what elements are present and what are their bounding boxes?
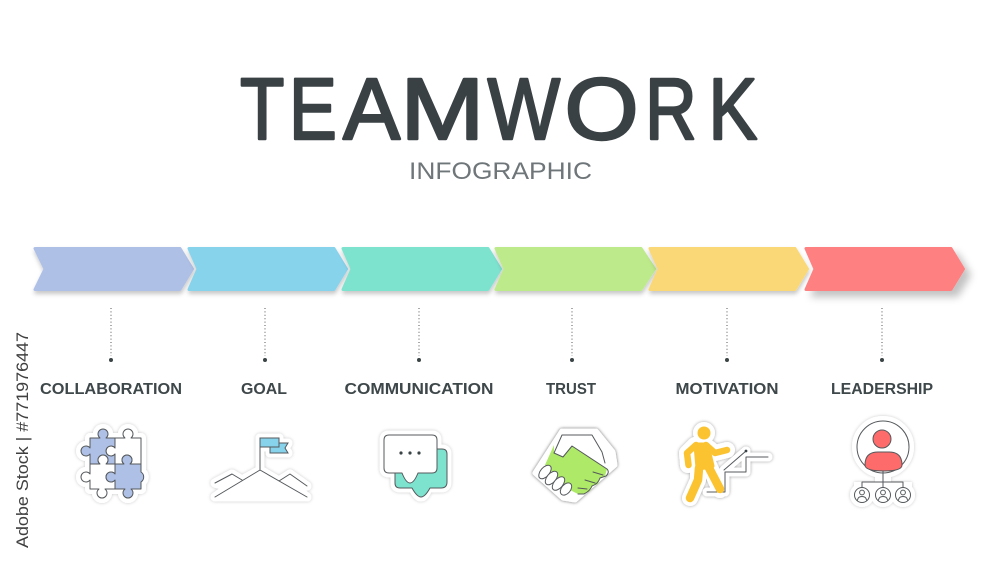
label: communication: COMMUNICATION (344, 381, 494, 398)
subtitle: INFOGRAPHIC (409, 158, 592, 185)
connector dots (109, 308, 884, 362)
arrow: leadership (806, 248, 964, 290)
label: collaboration: COLLABORATION (40, 381, 182, 398)
title: R (645, 60, 697, 158)
title: M (400, 60, 484, 158)
title: T (240, 61, 284, 159)
title: O (564, 61, 639, 158)
icon: handshake (535, 431, 615, 500)
title: A (343, 61, 400, 158)
icon: puzzle (81, 429, 144, 498)
label: trust: TRUST (546, 381, 596, 398)
text: Adobe Stock (833, 72, 995, 215)
text: Adobe Stock (423, 52, 585, 195)
arrow: collaboration (35, 248, 192, 290)
arrow: goal (189, 248, 346, 290)
title: E (289, 60, 337, 158)
icon: speech bubbles (384, 435, 447, 497)
text: Adobe Stock (833, 232, 995, 375)
title: K (708, 61, 757, 158)
text: Adobe Stock (43, 52, 205, 195)
label: goal: GOAL (241, 381, 287, 398)
title (240, 60, 757, 159)
text: Adobe Stock (713, 392, 875, 535)
text: Adobe Stock (383, 392, 545, 535)
icon: mountain flag (215, 438, 307, 497)
label: motivation: MOTIVATION (676, 381, 778, 398)
title: W (488, 60, 560, 158)
text: Adobe Stock (503, 192, 665, 335)
arrow: motivation (650, 248, 808, 290)
text: Adobe Stock (53, 402, 215, 545)
arrow: communication (343, 248, 500, 290)
side credit: Adobe Stock | #771976447 (13, 332, 32, 548)
arrow timeline (35, 248, 964, 290)
label: leadership: LEADERSHIP (831, 381, 933, 398)
text: Adobe Stock (183, 222, 345, 365)
icon: leader and team (854, 420, 911, 503)
icon: climbing person (687, 426, 768, 498)
arrow: trust (496, 248, 654, 290)
